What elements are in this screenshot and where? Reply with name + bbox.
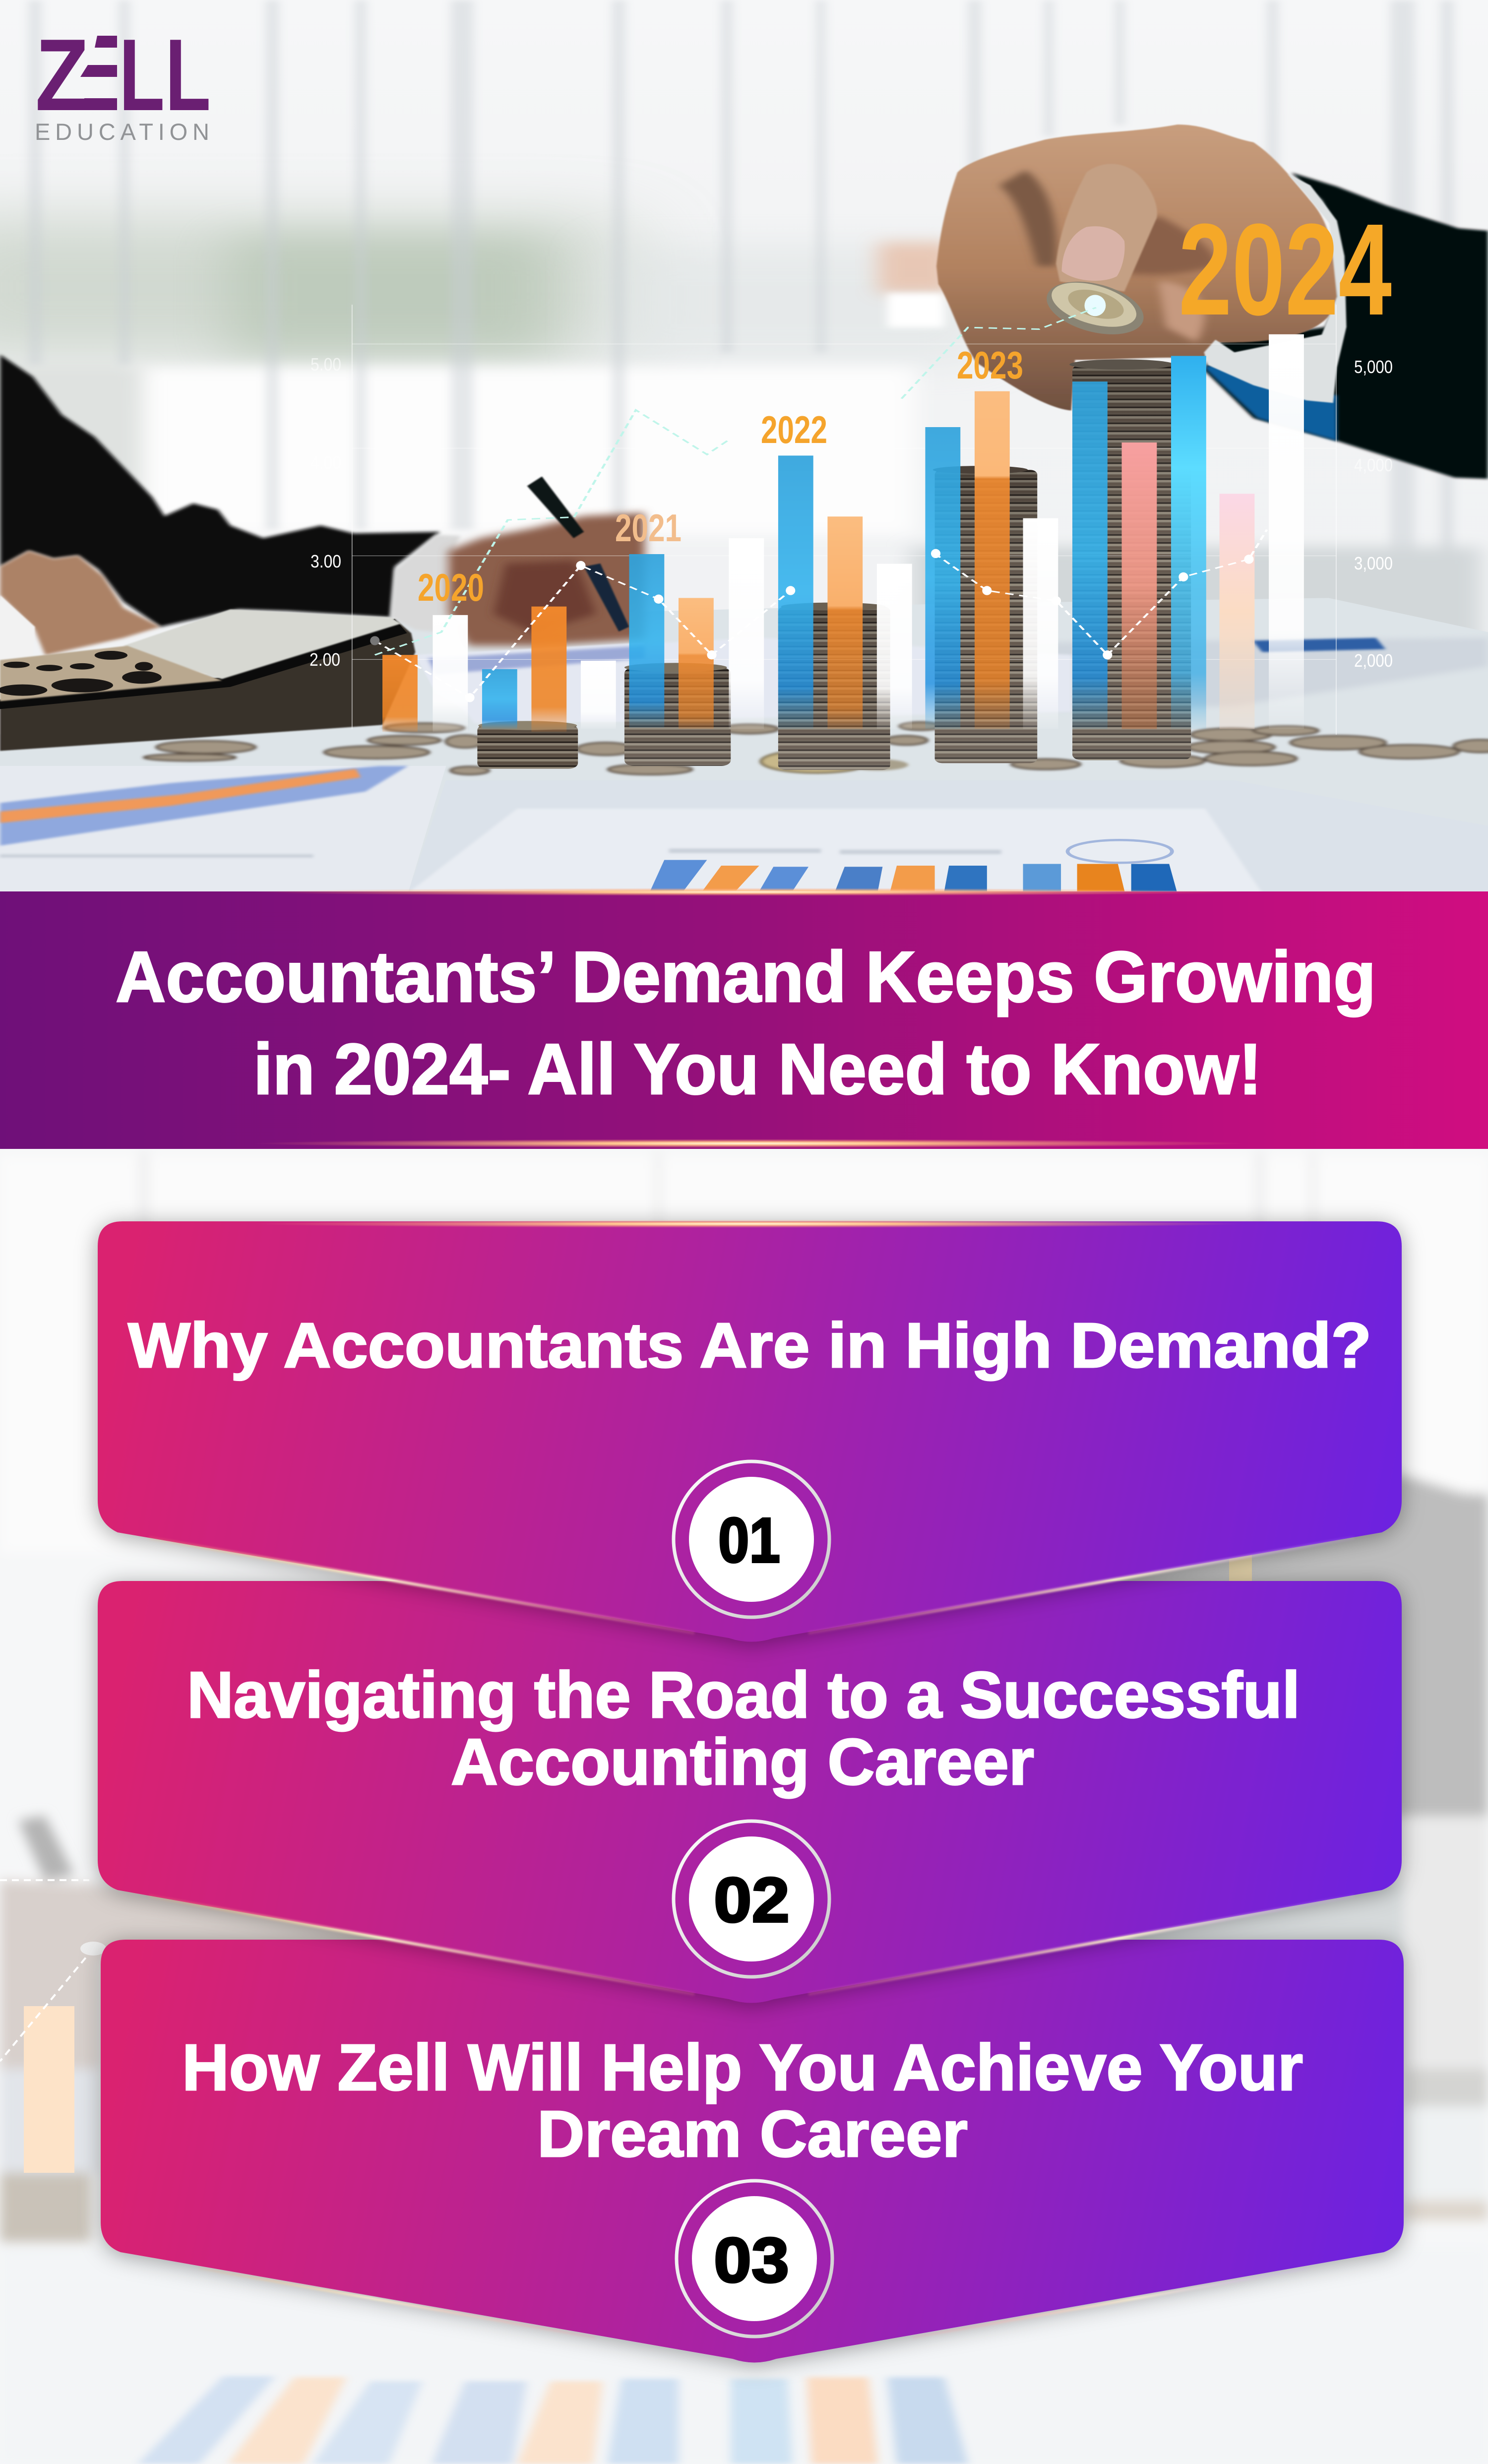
curtains and window background [0,0,1481,649]
coin [1033,271,1158,345]
right suit sleeve [1204,173,1488,479]
hand holding coin [936,125,1488,479]
card 2 heading: Navigating the Road to a Successful [187,1658,1300,1731]
card 2 heading [187,1658,1300,1798]
thumb [1056,164,1157,292]
bars 2023 [925,391,1058,729]
dashed trend lines [375,308,1267,697]
logo: L [119,18,165,132]
left axis labels: 2.00 [310,649,340,670]
logo: EDUCATION [35,119,209,145]
right axis labels: 4,000 [1354,455,1393,475]
number badge 03 [677,2181,832,2337]
faded background photo [0,1149,1488,2464]
number badge 02: 02 [714,1865,790,1936]
title text: in 2024- All You Need to Know! [253,1029,1262,1109]
number badge 03: 03 [714,2225,789,2296]
shirt cuff [1204,174,1347,403]
writing hand [448,513,645,646]
card 3 heading: Dream Career [537,2097,968,2170]
scattered coins [144,722,1488,774]
right axis labels: 5,000 [1354,357,1393,377]
card 1 heading: Why Accountants Are in High Demand? [128,1310,1371,1381]
left hand [0,551,160,655]
year labels: 2023 [957,343,1023,387]
right axis labels: 3,000 [1354,553,1393,573]
logo [35,18,211,145]
title text [116,937,1376,1109]
right axis labels: 2,000 [1354,650,1393,671]
number badge 02 [674,1821,829,1977]
pen [527,476,629,632]
left cuff [0,595,35,668]
left axis labels: 3.00 [310,551,341,571]
papers on the table [0,766,1488,893]
table surface [0,598,1488,893]
title banner [0,888,1488,1149]
card 2 heading: Accounting Career [451,1725,1034,1798]
left axis labels: 4.00 [310,452,341,473]
card 3 heading: How Zell Will Help You Achieve Your [182,2031,1303,2104]
document under hand [415,642,645,722]
title text: Accountants’ Demand Keeps Growing [116,937,1376,1017]
trend line markers [370,549,1253,702]
left suit sleeve [0,355,440,627]
left suit, hands and calculator [0,355,645,751]
card 3 heading [182,2031,1303,2170]
card 3 [101,1940,1404,2362]
hand shape [936,125,1337,411]
bars 2021 [629,538,764,729]
bars 2020 [382,607,616,732]
coin stacks [477,359,1191,770]
year labels: 2021 [615,506,682,550]
card 1 [98,1220,1402,1642]
year labels: 2020 [418,566,484,609]
2024 label: 2024 [1178,196,1392,342]
number badge 01 [674,1461,829,1617]
right axis labels [1354,357,1393,671]
shirt cuff [391,535,460,633]
calculator [0,619,415,751]
bars 2022 [778,455,912,729]
chart grid [352,305,1336,735]
logo: L [165,18,211,132]
number badge 01: 01 [718,1505,780,1576]
thumbnail [1062,226,1125,281]
card 2 [98,1581,1402,2003]
year labels: 2022 [761,408,827,451]
logo: Z [35,18,89,132]
year labels [418,343,1023,609]
bars 2024 [1072,334,1304,729]
left axis labels: 5.00 [310,354,341,375]
hero photo [0,0,1488,893]
left axis labels [310,354,341,670]
faded dashed line [0,1880,93,2061]
